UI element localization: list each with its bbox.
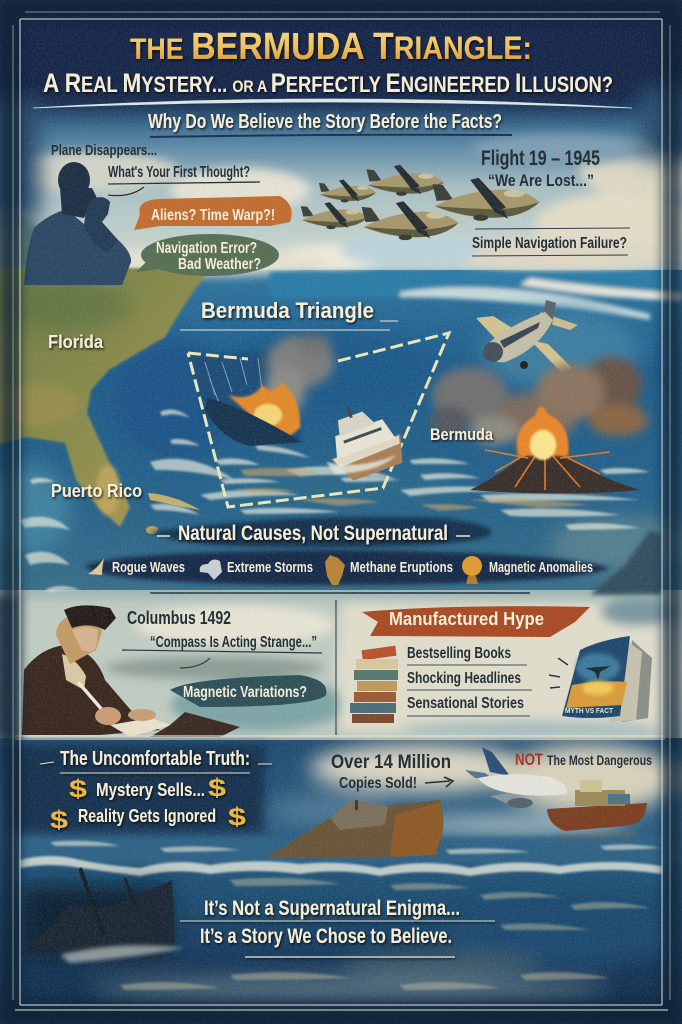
map heading: Bermuda Triangle: Bermuda Triangle xyxy=(201,298,374,323)
rusting wreck xyxy=(265,800,443,858)
smoke in triangle xyxy=(265,335,334,416)
uncomfortable truth text: The Uncomfortable Truth: xyxy=(60,748,250,770)
uncomfortable truth text: $ xyxy=(228,803,246,831)
bubble: navigation error: Bad Weather? xyxy=(178,256,261,273)
fire in triangle xyxy=(228,382,300,436)
sinking ship xyxy=(316,392,410,485)
columbus text xyxy=(122,608,322,668)
painted wave highlights xyxy=(20,410,650,592)
top navy vignette xyxy=(0,0,682,220)
clouds in sky xyxy=(0,134,682,277)
not the most dangerous xyxy=(515,750,652,769)
reflected ship glints xyxy=(555,833,640,850)
title: THE BERMUDA TRIANGLE: xyxy=(130,26,532,68)
closing statement: It’s a Story We Chose to Believe. xyxy=(200,925,452,948)
ocean waves band xyxy=(20,836,680,876)
myth vs fact book: MYTH VS FACT xyxy=(565,708,614,715)
icon: methane eruptions xyxy=(325,555,345,585)
not the most dangerous: NOT xyxy=(515,750,543,769)
subtitle: Why Do We Believe the Story Before the Facts? xyxy=(148,111,502,133)
banner: natural causes: Natural Causes, Not Supernatural xyxy=(178,522,448,545)
thought caption: plane disappears: Plane Disappears... xyxy=(51,142,157,159)
map land: Florida coast xyxy=(0,268,210,534)
legend: extreme storms: Extreme Storms xyxy=(227,559,313,576)
columbus panel backdrop xyxy=(0,596,350,740)
rain streaks xyxy=(205,358,262,405)
sunken dark ship xyxy=(25,868,175,955)
myth vs fact book xyxy=(562,636,652,722)
closing statement xyxy=(180,897,495,957)
foam at ship xyxy=(326,455,396,474)
volcano smoke xyxy=(430,357,648,444)
columbus text: “Compass Is Acting Strange...” xyxy=(150,634,317,651)
legend: rogue waves: Rogue Waves xyxy=(112,559,185,576)
thought caption: first thought: What's Your First Thought? xyxy=(108,164,250,181)
banner: manufactured hype: Manufactured Hype xyxy=(389,609,544,629)
flight 19 text: “We Are Lost...” xyxy=(488,171,594,190)
hype panel backdrop xyxy=(340,598,680,736)
bubble: aliens: Aliens? Time Warp?! xyxy=(151,207,275,224)
sky clouds in truth panel xyxy=(270,744,680,835)
thought caption: first thought xyxy=(108,164,260,196)
banner: manufactured hype xyxy=(362,606,590,637)
warm sea glints xyxy=(235,468,590,511)
icon: magnetic anomalies xyxy=(462,556,482,584)
bubble: navigation error: Navigation Error? xyxy=(156,240,257,257)
uncomfortable truth text xyxy=(40,748,272,834)
background sky xyxy=(0,0,682,285)
uncomfortable truth text: $ xyxy=(50,806,68,834)
foam at dark ship xyxy=(60,945,185,963)
flight 19 text: Simple Navigation Failure? xyxy=(472,235,627,252)
bubble: navigation error xyxy=(136,234,279,276)
deep water in map xyxy=(0,310,682,573)
vertical panel divider xyxy=(335,600,337,735)
map label: Florida: Florida xyxy=(48,332,104,352)
rocky coast xyxy=(590,530,662,595)
hype list: Shocking Headlines xyxy=(407,670,521,687)
light sea strokes xyxy=(120,878,650,990)
title: A REAL MYSTERY... OR A PERFECTLY ENGINEERED ILLUSION? xyxy=(43,68,613,98)
closing statement: It’s Not a Supernatural Enigma... xyxy=(204,897,460,920)
emphasis ticks xyxy=(549,658,568,688)
horizon sea strip xyxy=(270,272,682,320)
map label: Bermuda: Bermuda xyxy=(430,425,493,444)
uncomfortable truth text: Mystery Sells... xyxy=(96,780,205,800)
volcano eruption xyxy=(470,406,640,494)
title divider xyxy=(33,99,632,108)
flight 19 squadron xyxy=(301,165,540,240)
columbus text: Columbus 1492 xyxy=(127,608,231,628)
background lower ocean xyxy=(0,738,682,1024)
flight 19 text xyxy=(472,147,630,256)
flight 19 text: Flight 19 – 1945 xyxy=(481,147,600,170)
book stack xyxy=(350,646,398,723)
background lower panels xyxy=(0,590,682,740)
airliner xyxy=(465,747,567,808)
not the most dangerous: The Most Dangerous xyxy=(547,752,652,768)
uncomfortable truth text: $ xyxy=(208,774,226,802)
man silhouette thinking xyxy=(24,162,131,285)
bubble: magnetic variations xyxy=(170,675,326,707)
uncomfortable truth text: $ xyxy=(69,775,87,803)
hype list: Sensational Stories xyxy=(407,695,524,712)
uncomfortable truth backdrop xyxy=(10,745,265,833)
map label: Puerto Rico: Puerto Rico xyxy=(51,481,142,501)
title xyxy=(43,26,613,98)
legend: methane eruptions: Methane Eruptions xyxy=(350,559,453,576)
dashed triangle outline xyxy=(188,333,449,507)
legend band xyxy=(85,550,610,585)
bubble: magnetic variations: Magnetic Variations? xyxy=(183,684,307,701)
dark deep sea xyxy=(20,885,680,1000)
legend: magnetic anomalies: Magnetic Anomalies xyxy=(489,559,593,576)
hype list xyxy=(407,645,532,716)
copies sold text: Over 14 Million xyxy=(331,752,451,773)
icon: rogue waves xyxy=(88,558,104,575)
double separator xyxy=(15,736,665,739)
icon: extreme storms xyxy=(200,560,222,580)
map heading: Bermuda Triangle xyxy=(180,298,398,330)
banner: natural causes xyxy=(150,517,491,547)
hype list: Bestselling Books xyxy=(407,645,511,662)
cargo ship xyxy=(547,780,647,831)
breaking wave xyxy=(205,398,302,446)
columbus figure xyxy=(22,605,240,737)
copies sold text: Copies Sold! xyxy=(339,775,417,792)
subtitle underline xyxy=(150,135,512,137)
copies sold text xyxy=(331,752,453,792)
uncomfortable truth text: Reality Gets Ignored xyxy=(78,806,216,826)
background sea and map xyxy=(0,270,682,600)
bubble: aliens xyxy=(134,196,292,230)
biplane above Bermuda xyxy=(476,300,578,373)
dark water inside triangle corner xyxy=(190,350,302,445)
